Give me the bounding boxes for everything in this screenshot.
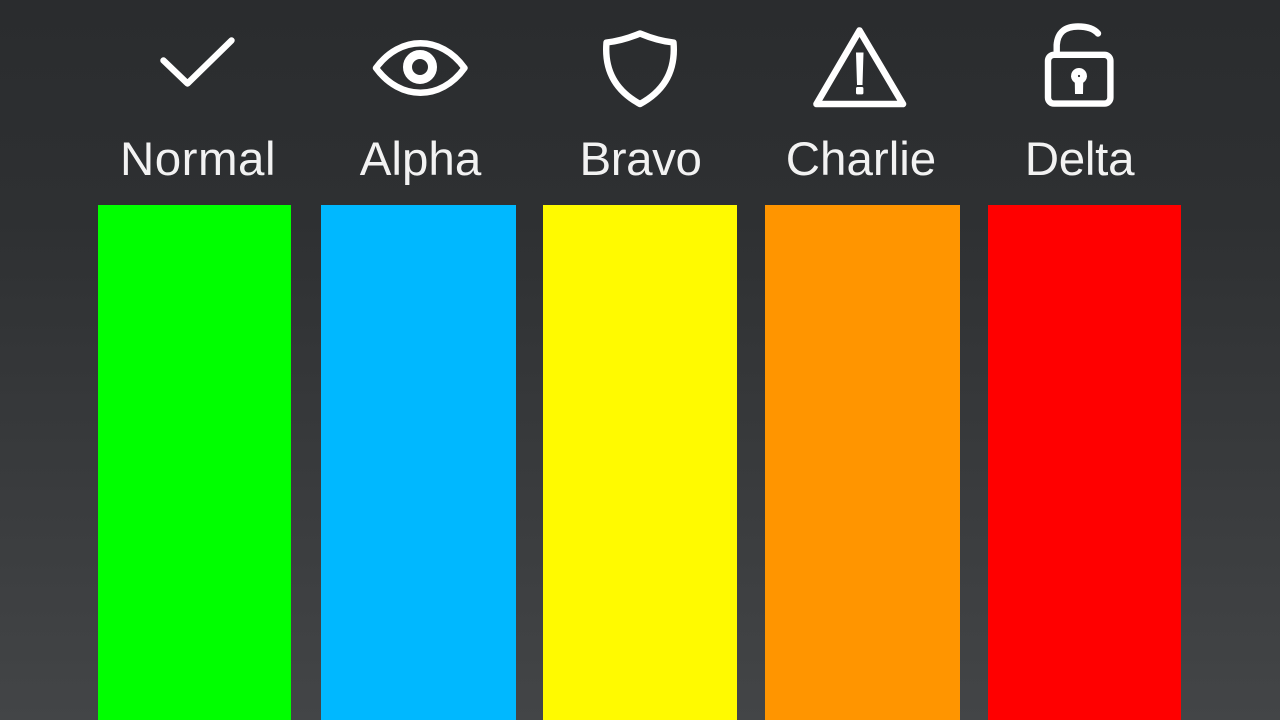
bar: blue [321, 205, 516, 720]
bar: green [98, 205, 291, 720]
icon: check mark [164, 40, 232, 84]
label: Charlie: Charlie [786, 133, 936, 186]
bar: yellow [543, 205, 737, 720]
label: Bravo: Bravo [579, 133, 702, 186]
icons row [160, 23, 1114, 108]
label: Normal: Normal [120, 133, 276, 186]
icon: shield [606, 34, 674, 104]
label: Alpha: Alpha [360, 133, 481, 186]
bar: red [988, 205, 1181, 720]
icon: open padlock [1048, 26, 1110, 104]
bar: orange [765, 205, 960, 720]
label: Delta: Delta [1025, 133, 1134, 186]
icon: eye [376, 43, 464, 93]
icon: warning triangle [816, 30, 903, 104]
